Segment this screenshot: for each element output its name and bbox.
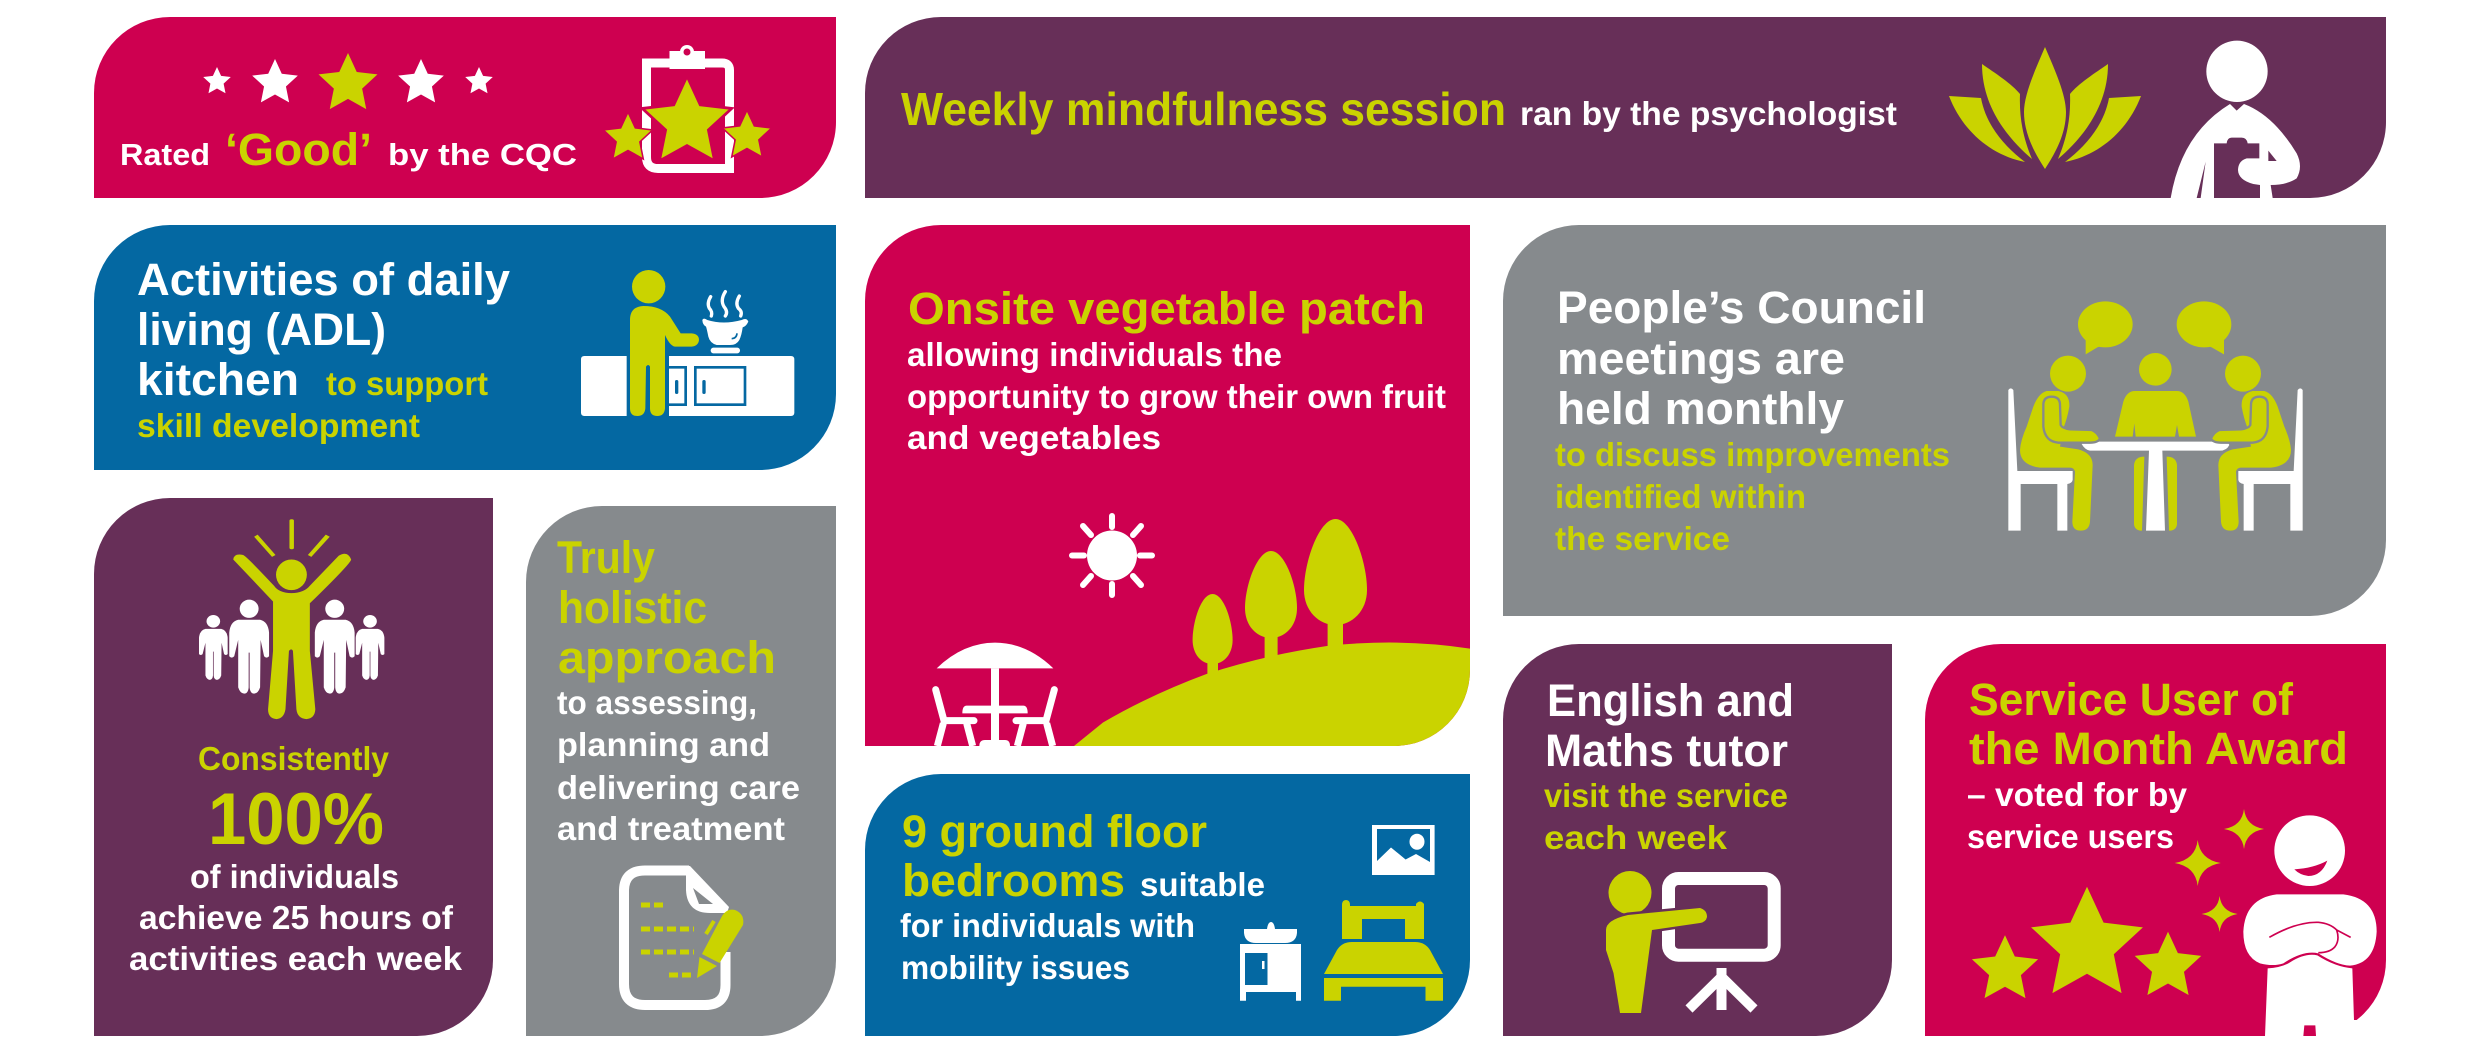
icon: framed picture [1372,825,1435,875]
heading: people's council meetings: meetings are [1557,333,1845,384]
icon: psychologist with clipboard [2171,41,2300,198]
panel background [1503,644,1892,1036]
heading: service user of the month award: – voted for by [1967,776,2188,813]
text: consistently 100% of individuals: of individuals [190,858,399,895]
text: truly holistic approach [557,532,800,847]
text: truly holistic approach: to assessing, [557,684,757,721]
heading: english and maths tutor: English and [1547,675,1794,726]
heading: english and maths tutor [1544,675,1794,856]
heading: english and maths tutor: each week [1544,819,1728,856]
panel: rated good by the CQC [94,17,836,198]
text: truly holistic approach: Truly [557,532,655,583]
heading: ground floor bedrooms: suitable [1140,866,1265,903]
icon: bedside cabinet with sink [1240,922,1301,1001]
heading: service user of the month award: Service User of [1969,674,2294,725]
panel background [1503,225,2386,616]
heading: people's council meetings: People’s Council [1557,282,1926,333]
heading: english and maths tutor: Maths tutor [1545,725,1788,776]
icon: hill and trees [1074,519,1470,746]
panel background [94,498,493,1036]
panel background [526,506,836,1036]
heading: ground floor bedrooms: bedrooms [902,855,1125,906]
heading: onsite vegetable patch: Onsite vegetable patch [908,283,1425,334]
icon: meeting around a table [2008,301,2303,531]
panel background [94,225,836,470]
icon: document and pencil [624,866,743,1005]
heading: onsite vegetable patch: opportunity to grow their own fruit [907,378,1446,415]
icon: lotus flower [1949,47,2141,169]
heading: weekly mindfulness session [901,83,1897,135]
icon: tutor pointing at a board [1606,871,1774,1013]
panel: activities of daily living kitchen [94,225,836,470]
heading: weekly mindfulness session: Weekly mindfulness session [901,83,1506,135]
icon: sparkles [2175,809,2264,932]
heading: people's council meetings: the service [1555,520,1730,557]
panel: people's council meetings [1503,225,2386,616]
heading: ground floor bedrooms: mobility issues [901,949,1130,986]
heading: onsite vegetable patch [907,283,1446,456]
heading: rated good by the CQC [120,124,577,175]
heading: activities of daily living kitchen: living (ADL) [137,304,386,355]
heading: rated good by the CQC: ‘Good’ [225,124,372,175]
heading: people's council meetings: to discuss improvements [1555,436,1950,473]
heading: people's council meetings: held monthly [1557,383,1844,434]
panel background [94,17,836,198]
icon: clipboard with stars [603,45,772,168]
icon: celebrating person with group [199,519,384,719]
panel: truly holistic approach [526,506,836,1036]
panel: onsite vegetable patch [865,225,1470,746]
heading: service user of the month award: the Month Award [1969,723,2348,774]
heading: service user of the month award [1967,674,2348,855]
panel: service user of the month award [1925,644,2393,1036]
panel background [865,225,1470,746]
icon: bed [1324,900,1443,1001]
text: consistently 100% of individuals: activities each week [129,940,463,977]
heading: people's council meetings: identified within [1555,478,1806,515]
icon: sun [1072,516,1152,595]
heading: activities of daily living kitchen [137,254,510,444]
heading: activities of daily living kitchen: skill development [137,407,420,444]
text: truly holistic approach: planning and [557,726,770,763]
heading: ground floor bedrooms: 9 ground floor [902,806,1207,857]
text: consistently 100% of individuals [129,740,463,977]
text: truly holistic approach: and treatment [557,810,785,847]
panel background [865,17,2386,198]
heading: onsite vegetable patch: and vegetables [907,419,1161,456]
heading: activities of daily living kitchen: kitchen [137,354,299,405]
icon: person cooking at a kitchen counter [581,270,794,416]
heading: ground floor bedrooms: for individuals with [900,907,1195,944]
heading: onsite vegetable patch: allowing individuals the [907,336,1282,373]
icon: patio table, parasol and chairs [936,643,1054,746]
heading: english and maths tutor: visit the service [1544,777,1788,814]
text: truly holistic approach: holistic [558,582,707,633]
icon: row of five stars [203,53,493,109]
heading: rated good by the CQC: by the CQC [388,137,577,172]
text: truly holistic approach: delivering care [557,769,800,806]
panel: ground floor bedrooms [865,774,1470,1036]
panel: english and maths tutor [1503,644,1892,1036]
heading: ground floor bedrooms [900,806,1265,986]
text: consistently 100% of individuals: Consistently [198,740,390,777]
text: consistently 100% of individuals: 100% [208,779,384,860]
heading: people's council meetings [1555,282,1950,557]
heading: activities of daily living kitchen: Activities of daily [137,254,510,305]
text: consistently 100% of individuals: achieve 25 hours of [139,899,454,936]
panel background [1925,644,2386,1036]
icon: three award stars [1972,887,2201,998]
heading: weekly mindfulness session: ran by the psychologist [1520,95,1897,132]
heading: service user of the month award: service users [1967,818,2174,855]
heading: activities of daily living kitchen: to support [326,365,488,402]
panel: weekly mindfulness session [865,17,2386,198]
heading: rated good by the CQC: Rated [120,137,210,172]
panel: 100% of individuals achieve 25 hours [94,498,493,1036]
icon: smiling person with crossed arms [2243,815,2393,1036]
panel background [865,774,1470,1036]
text: truly holistic approach: approach [558,632,776,683]
